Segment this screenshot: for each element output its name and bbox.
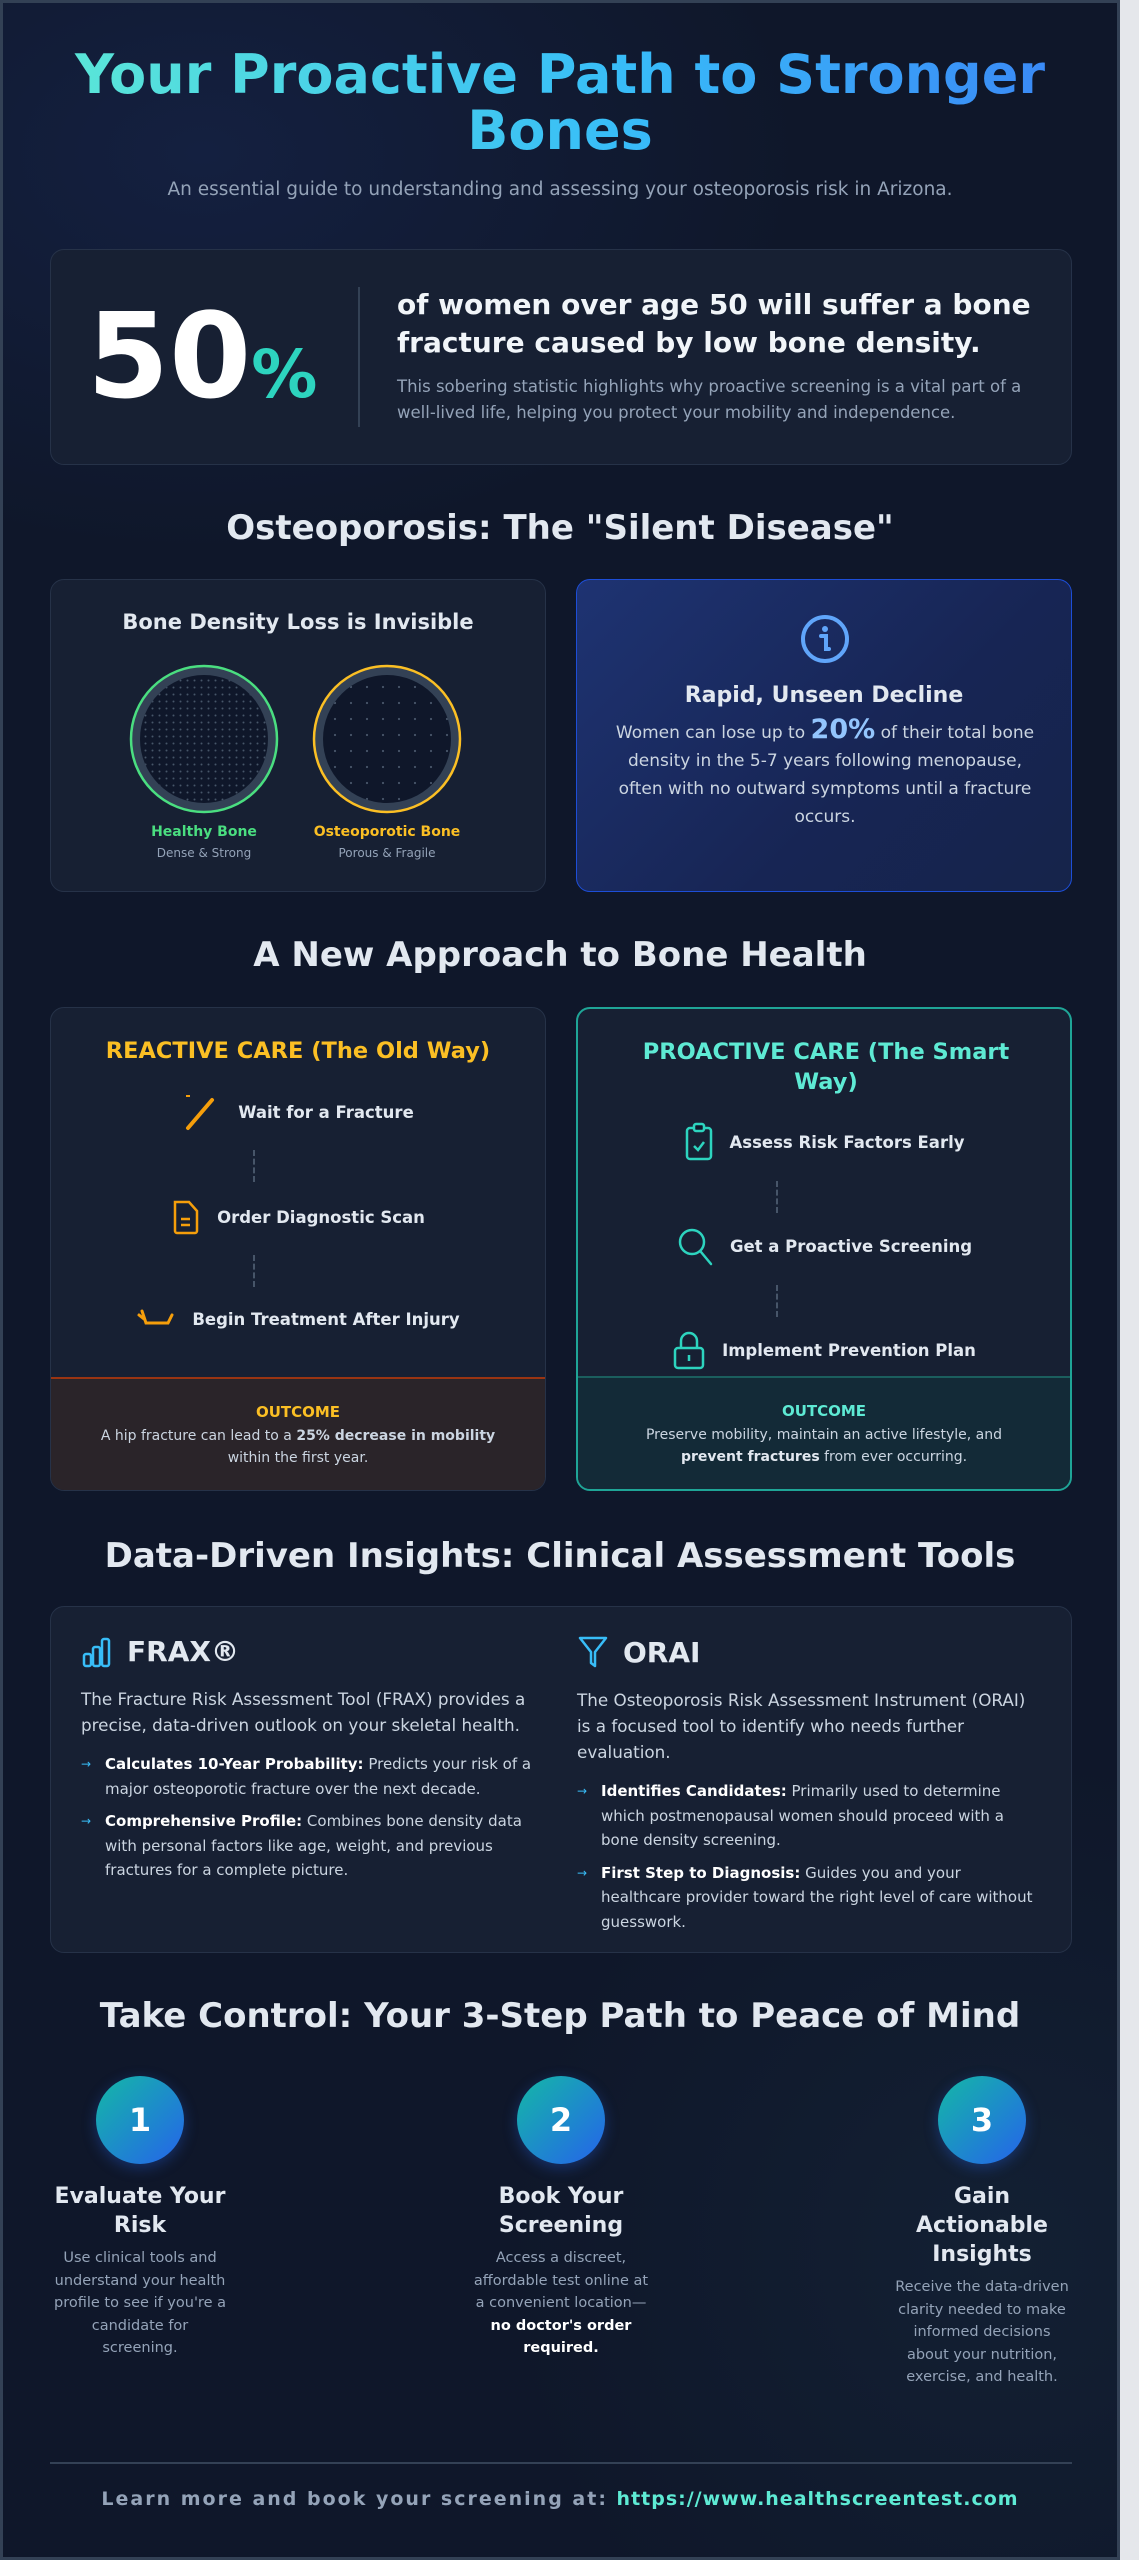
title [3, 47, 1117, 159]
panel: statistic [50, 249, 1072, 465]
step 3: 3 [971, 2101, 993, 2139]
tool: ORAI: The Osteoporosis Risk Assessment Instrument (ORAI) is a focused tool to identify who needs further evaluation. [577, 1690, 1025, 1762]
tool: ORAI [576, 1636, 1032, 1930]
outcome: reactive: OUTCOME [256, 1403, 340, 1421]
label: healthy: Healthy Bone [151, 824, 257, 840]
step 1: candidate for [92, 2318, 188, 2334]
description: Women can lose up to 20% of their total bone density in the 5-7 years following menopause, often with no outward symptoms until a fracture occurs. [616, 714, 1034, 827]
item: wait for fracture [186, 1095, 414, 1130]
tool: ORAI: Identifies Candidates: Primarily used to determine which postmenopausal women should proceed with a bone density screening. [601, 1782, 1004, 1849]
step 3 [895, 2074, 1069, 2385]
big number: 50% [87, 287, 317, 425]
step 2 [474, 2073, 648, 2356]
outcome: reactive [51, 1377, 545, 1492]
item: assess [686, 1122, 964, 1160]
step 3: Receive the data-driven [895, 2279, 1069, 2295]
label: healthy: Dense & Strong [157, 846, 251, 860]
step 1: screening. [102, 2340, 178, 2356]
item: prevention: Implement Prevention Plan [722, 1340, 976, 1360]
step 3: informed decisions [913, 2324, 1051, 2340]
heading: data-driven insights: Data-Driven Insights: Clinical Assessment Tools [105, 1536, 1015, 1576]
title: Rapid, Unseen Decline [685, 683, 963, 708]
tool: FRAX: FRAX® [127, 1635, 239, 1668]
title: Bones [467, 99, 653, 162]
step 2: no doctor's order [491, 2318, 631, 2334]
label: osteoporotic: Porous & Fragile [338, 846, 436, 860]
tool: FRAX [80, 1635, 531, 1879]
icon: healthy bone [130, 664, 278, 814]
step 1: Evaluate Your Risk [55, 2184, 225, 2238]
step 2: 2 [550, 2101, 572, 2139]
title: Your Proactive Path to Stronger [75, 43, 1045, 106]
item: prevention [674, 1332, 976, 1370]
step 1: understand your health [55, 2272, 225, 2288]
panel: reactive care [50, 1007, 546, 1491]
step 3: about your nutrition, [907, 2346, 1057, 2362]
step 2: required. [523, 2340, 599, 2356]
stat headline: of women over age 50 will suffer a bone fracture caused by low bone density. [397, 288, 1031, 359]
step 2: affordable test online at [474, 2272, 648, 2288]
panel: assessment tools [50, 1606, 1072, 1953]
stat description: This sobering statistic highlights why proactive screening is a vital part of a well-lived life, helping you protect your mobility and independence. [397, 377, 1021, 422]
label: osteoporotic [314, 824, 460, 860]
step 1: 1 [129, 2101, 151, 2139]
outcome: proactive: OUTCOME [782, 1402, 866, 1420]
item: screening [678, 1228, 972, 1266]
step 1: Use clinical tools and [63, 2250, 217, 2266]
label: healthy [151, 824, 257, 860]
item: assess: Assess Risk Factors Early [730, 1132, 964, 1152]
heading: take control: Take Control: Your 3-Step Path to Peace of Mind [100, 1996, 1020, 2036]
outcome: reactive: A hip fracture can lead to a 25% decrease in mobility within the first year. [101, 1428, 495, 1466]
tool: ORAI: ORAI [623, 1636, 700, 1668]
tool: ORAI: First Step to Diagnosis: Guides you and your healthcare provider toward the right level of care without guesswork. [601, 1864, 1032, 1930]
outcome: proactive: Preserve mobility, maintain an active lifestyle, and prevent fractures from ever occurring. [646, 1427, 1002, 1465]
item: order scan [174, 1200, 425, 1234]
outcome: proactive [578, 1376, 1070, 1493]
icon: osteoporotic bone [312, 664, 462, 814]
item: wait for fracture: Wait for a Fracture [238, 1102, 414, 1122]
item: order scan: Order Diagnostic Scan [217, 1208, 425, 1226]
tool: FRAX: Comprehensive Profile: Combines bone density data with personal factors like age, weight, and previous fractures for a complete picture. [105, 1812, 522, 1879]
step 3: Gain Actionable Insights [916, 2184, 1048, 2267]
tool: FRAX: The Fracture Risk Assessment Tool (FRAX) provides a precise, data-driven outlook on your skeletal health. [81, 1689, 525, 1735]
step 3: clarity needed to make [898, 2302, 1066, 2318]
footer: Learn more and book your screening at: https://www.healthscreentest.com [101, 2488, 1019, 2510]
item: screening: Get a Proactive Screening [730, 1236, 972, 1256]
label: osteoporotic: Osteoporotic Bone [314, 824, 460, 840]
heading: silent disease: Osteoporosis: The "Silent Disease" [226, 508, 894, 548]
subtitle: An essential guide to understanding and assessing your osteoporosis risk in Arizona. [167, 179, 953, 200]
step 1: profile to see if you're a [54, 2295, 226, 2311]
icon: info [801, 615, 849, 663]
step 3: exercise, and health. [906, 2369, 1058, 2385]
step 2: Access a discreet, [496, 2250, 626, 2266]
panel: rapid decline [576, 579, 1072, 892]
step 2: Book Your Screening [499, 2184, 623, 2238]
item: begin treatment: Begin Treatment After Injury [192, 1310, 460, 1328]
title: REACTIVE CARE (The Old Way) [106, 1038, 490, 1064]
panel title: Bone Density Loss is Invisible [122, 610, 474, 634]
panel: proactive care [576, 1007, 1072, 1491]
heading: new approach: A New Approach to Bone Health [253, 935, 867, 975]
step 1 [54, 2073, 226, 2356]
panel: bone density [50, 579, 546, 892]
title: PROACTIVE CARE (The Smart Way) [643, 1039, 1009, 1095]
step 2: a convenient location— [476, 2295, 646, 2311]
tool: FRAX: Calculates 10-Year Probability: Predicts your risk of a major osteoporotic fracture over the next decade. [105, 1755, 531, 1798]
